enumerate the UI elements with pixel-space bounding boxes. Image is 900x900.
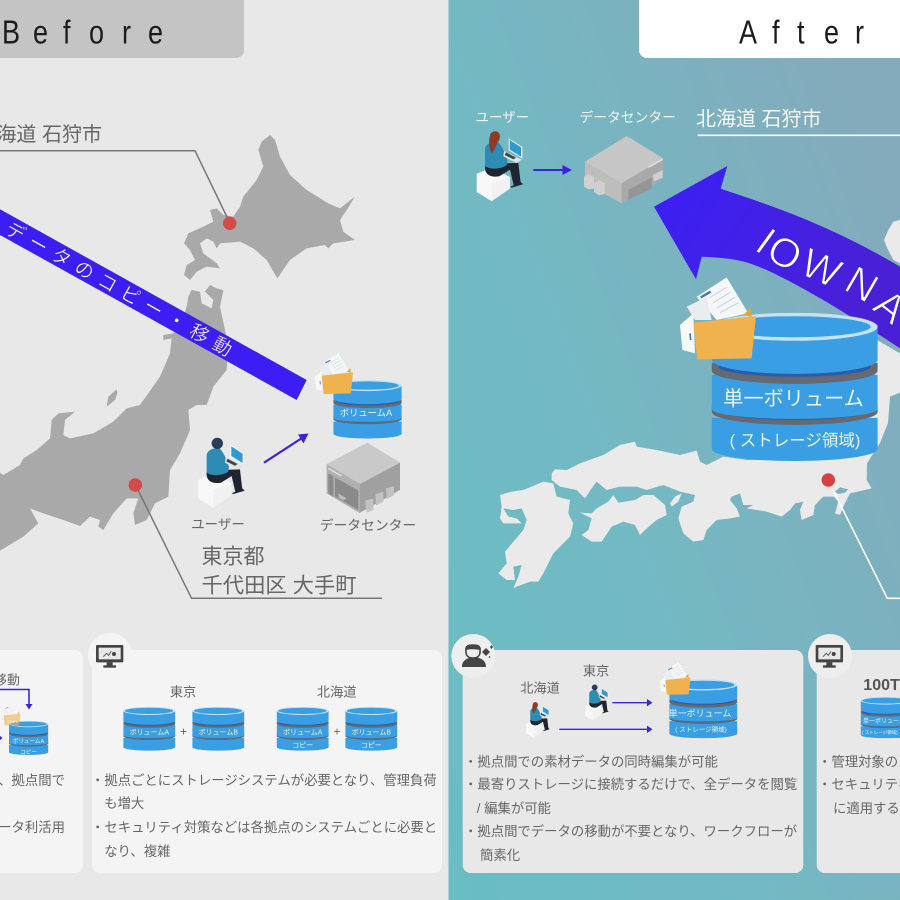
- group: Tokyo volumes: [123, 684, 244, 751]
- callout: Tokyo Otemachi leader: 千代田区 大手町: [202, 574, 356, 598]
- panel: after background: [448, 0, 900, 900]
- group: Hokkaido volumes: 北海道: [317, 684, 356, 700]
- group: Hokkaido volumes: コピー: [361, 742, 382, 750]
- icon: monitor: [88, 633, 132, 677]
- group: Hokkaido volumes: +: [333, 724, 341, 738]
- label: Hokkaido: 北海道: [520, 680, 560, 696]
- arrow: Tokyo to volume: [612, 699, 652, 706]
- label: data center: データセンター: [320, 517, 416, 533]
- panel: after simultaneous editing: [451, 634, 803, 873]
- text: after bullets: / 編集が可能: [477, 801, 551, 816]
- text: after bullets: 簡素化: [480, 848, 520, 863]
- label: user after: ユーザー: [475, 110, 529, 125]
- icon: data center before: [327, 443, 400, 513]
- group: Hokkaido volumes: コピー: [292, 742, 313, 750]
- text: partial bullets: 、拠点間で: [0, 773, 65, 788]
- icon: volume A copy with folder: ボリュームA: [13, 737, 45, 745]
- group: Tokyo volumes: 東京: [170, 684, 196, 700]
- icon: user woman after: [477, 131, 523, 201]
- arrow: user to volume: [264, 434, 308, 463]
- icon: volume A database with folder: ボリュームA: [340, 408, 393, 418]
- panel: after unified management: [808, 634, 900, 873]
- icon: single volume large database with folder: ( ストレージ領域): [730, 431, 860, 450]
- icon: volume A copy with folder: [0, 703, 48, 756]
- callout: Hokkaido Ishikari leader: [0, 123, 236, 230]
- panel: before storage partial left: [0, 650, 83, 873]
- group: Hokkaido volumes: ボリュームA: [283, 728, 323, 736]
- callout: Hokkaido Ishikari after: 北海道 石狩市: [696, 108, 822, 130]
- icon: woman small: [526, 702, 550, 738]
- arrow: move path: [0, 690, 32, 740]
- callout: Tokyo Otemachi leader: 東京都: [202, 546, 264, 568]
- callout: Tokyo after leader: [822, 473, 900, 598]
- panel: before system management: [88, 633, 442, 873]
- icon: user with sparkle: [451, 634, 495, 678]
- arrow band: data copy and move: データのコピー・移動: [1, 218, 242, 365]
- icon: volume A database with folder: [315, 353, 402, 438]
- icon: single volume database: ( ストレージ領域): [675, 724, 727, 734]
- group: Hokkaido volumes: ボリュームB: [352, 728, 391, 736]
- text: after partial bullets: [818, 754, 900, 816]
- text: before bullets: も増大: [104, 796, 144, 811]
- arrow: user to data center after: [533, 165, 572, 175]
- label: user: ユーザー: [191, 517, 245, 532]
- icon: single volume small: ( ストレージ領域): [862, 729, 898, 736]
- icon: single volume large database with folder: 単一ボリューム: [723, 388, 864, 410]
- text: before bullets: [91, 773, 437, 859]
- group: Tokyo volumes: ボリュームA: [130, 728, 169, 736]
- map: Japan before: [0, 135, 355, 552]
- heading: Before: [0, 0, 244, 58]
- arrow: Hokkaido to volume: [559, 726, 652, 733]
- text: partial bullets: ータ利活用: [0, 820, 65, 835]
- map: Japan after: [498, 220, 900, 588]
- arrow: IOWN APN: [654, 166, 900, 371]
- heading: After: After: [739, 15, 864, 51]
- icon: volume A copy with folder: コピー: [20, 749, 37, 756]
- text: after bullets: [464, 754, 798, 863]
- icon: single volume large database with folder: [680, 277, 878, 461]
- group: Hokkaido volumes: [277, 684, 397, 751]
- text: before bullets: なり、複雑: [104, 843, 170, 859]
- icon: single volume small: [861, 697, 900, 738]
- heading: Before: Before: [2, 15, 163, 51]
- icon: user man before: [198, 438, 245, 508]
- icon: volume A copy with folder: COPY: [8, 720, 18, 724]
- icon: man small: [585, 685, 609, 720]
- text: before bullets: ・セキュリティ対策などは各拠点のシステムごとに必要と: [91, 819, 437, 835]
- text: after bullets: ・最寄りストレージに接続するだけで、全データを閲覧: [464, 776, 797, 792]
- heading: After: [639, 0, 900, 58]
- label: Tokyo: 東京: [583, 664, 609, 678]
- text: before bullets: ・拠点ごとにストレージシステムが必要となり、管理負荷: [91, 773, 437, 788]
- icon: single volume database: [660, 662, 737, 738]
- label: data center after: データセンター: [579, 109, 676, 125]
- icon: monitor after: [808, 634, 852, 678]
- group: Tokyo volumes: ボリュームB: [199, 728, 238, 736]
- panel: before background: [0, 0, 448, 900]
- text: after bullets: ・拠点間での素材データの同時編集が可能: [464, 754, 718, 770]
- text: after bullets: ・拠点間でデータの移動が不要となり、ワークフローが: [464, 823, 798, 839]
- icon: data center after: [584, 136, 663, 203]
- group: Tokyo volumes: +: [180, 724, 187, 738]
- icon: single volume database: 単一ボリューム: [669, 708, 731, 718]
- text: partial bullets: [0, 773, 65, 835]
- callout: Tokyo Otemachi leader: [129, 478, 382, 598]
- arrow band: data copy and move: [0, 209, 307, 400]
